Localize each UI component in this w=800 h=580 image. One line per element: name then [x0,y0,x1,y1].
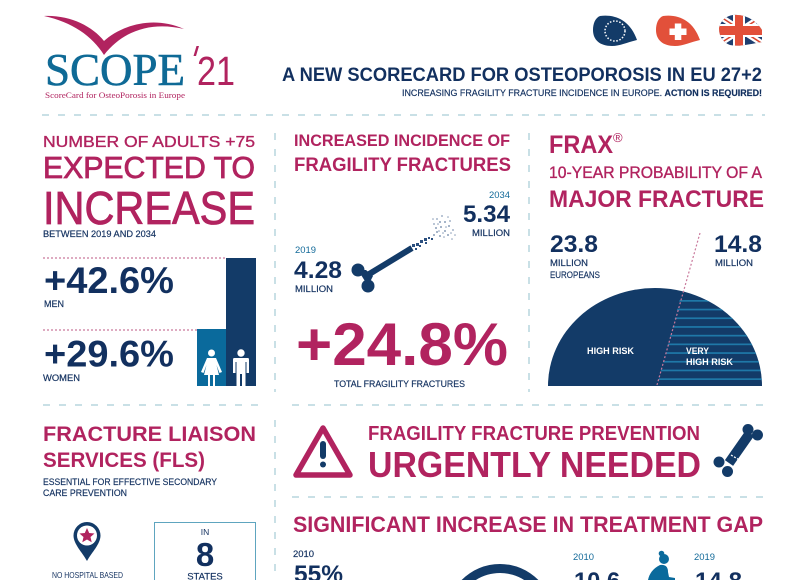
period: BETWEEN 2019 AND 2034 [43,229,156,239]
icon: broken bone [714,424,763,477]
label: women: WOMEN [43,373,80,383]
label: million europeans: MILLION [550,258,588,269]
panel: prevention urgently needed [296,423,763,485]
sub heading: INCREASING FRAGILITY FRACTURE INCIDENCE IN EUROPE. ACTION IS REQUIRED! [402,88,762,98]
heading line 1: FRAGILITY FRACTURE PREVENTION [368,423,700,445]
logo tagline: ScoreCard for OsteoPorosis in Europe [45,90,185,100]
chart: risk dome: HIGH RISK [686,357,733,368]
value 8: 8 [196,536,214,573]
label: high risk: HIGH RISK [587,346,634,357]
heading: expected to: EXPECTED TO [43,151,255,185]
stat: total increase: +24.8% [296,311,508,378]
chart: risk dome [548,233,770,386]
value 23.8: 23.8 [550,231,598,258]
label 2019: 2019 [694,552,715,563]
heading: NUMBER OF ADULTS +75 [43,134,255,151]
logo: SCOPE '21 [44,16,235,100]
label: million: MILLION [715,258,753,269]
caption: NO HOSPITAL BASED [52,570,123,580]
heading: increase: INCREASE [43,182,255,234]
flags [593,14,762,46]
panel: treatment gap [293,512,763,580]
chart: donut [462,564,538,580]
value 14.8: 14.8 [714,231,762,258]
label 2019: 2019 [295,245,316,256]
label: very high risk: VERY [686,346,710,357]
main heading: A NEW SCORECARD FOR OSTEOPOROSIS IN EU 27+2 [282,64,762,86]
heading line 2: FRAGILITY FRACTURES [294,154,511,176]
icon: man [233,349,249,386]
caption: TOTAL FRAGILITY FRACTURES [334,379,465,390]
icon: map pin with star [74,522,100,561]
description: ESSENTIAL FOR EFFECTIVE SECONDARY [43,477,218,488]
heading: 10-year probability: 10-YEAR PROBABILITY OF A [549,164,762,182]
heading line 1: INCREASED INCIDENCE OF [294,131,510,150]
heading: SIGNIFICANT INCREASE IN TREATMENT GAP [293,512,763,537]
panel: fracture liaison services: CARE PREVENTION [43,488,127,499]
logo apostrophe [194,46,199,56]
heading line 2: URGENTLY NEEDED [368,444,701,485]
icon: disintegrating bone [352,215,456,292]
stat: women: +29.6% [44,334,174,374]
value 4.28: 4.28 [294,257,342,284]
heading line 2: SERVICES (FLS) [43,449,205,472]
flag: Switzerland [656,16,700,46]
flag: UK [719,14,762,46]
panel: FRAX [548,130,770,386]
callout: 8 states [154,522,256,580]
icon: warning triangle [296,428,350,475]
registered mark: ® [613,130,623,145]
bar chart: men and women [197,258,256,386]
panel: fracture liaison services [43,423,256,580]
label 2034: 2034 [489,190,510,201]
panel: FRAX: EUROPEANS [550,270,600,281]
panel: fragility fractures [294,131,511,390]
icon: person [648,551,675,580]
label: in: IN [201,527,209,537]
panel: adults over 75 [43,134,256,386]
label 2010: 2010 [293,549,314,560]
logo wordmark: SCOPE [45,44,185,95]
million: MILLION [295,284,333,295]
label: men: MEN [44,299,64,309]
stat: men: +42.6% [44,260,174,301]
million: MILLION [472,228,510,239]
heading line 1: FRACTURE LIAISON [43,423,256,446]
flag: EU [593,16,637,46]
value 5.34: 5.34 [463,201,511,228]
heading: major fracture: MAJOR FRACTURE [549,186,764,213]
icon: woman [201,350,222,386]
heading: FRAX: FRAX [549,131,613,159]
label 2010: 2010 [573,552,594,563]
logo bird [44,16,184,55]
logo year: 21 [197,48,235,94]
